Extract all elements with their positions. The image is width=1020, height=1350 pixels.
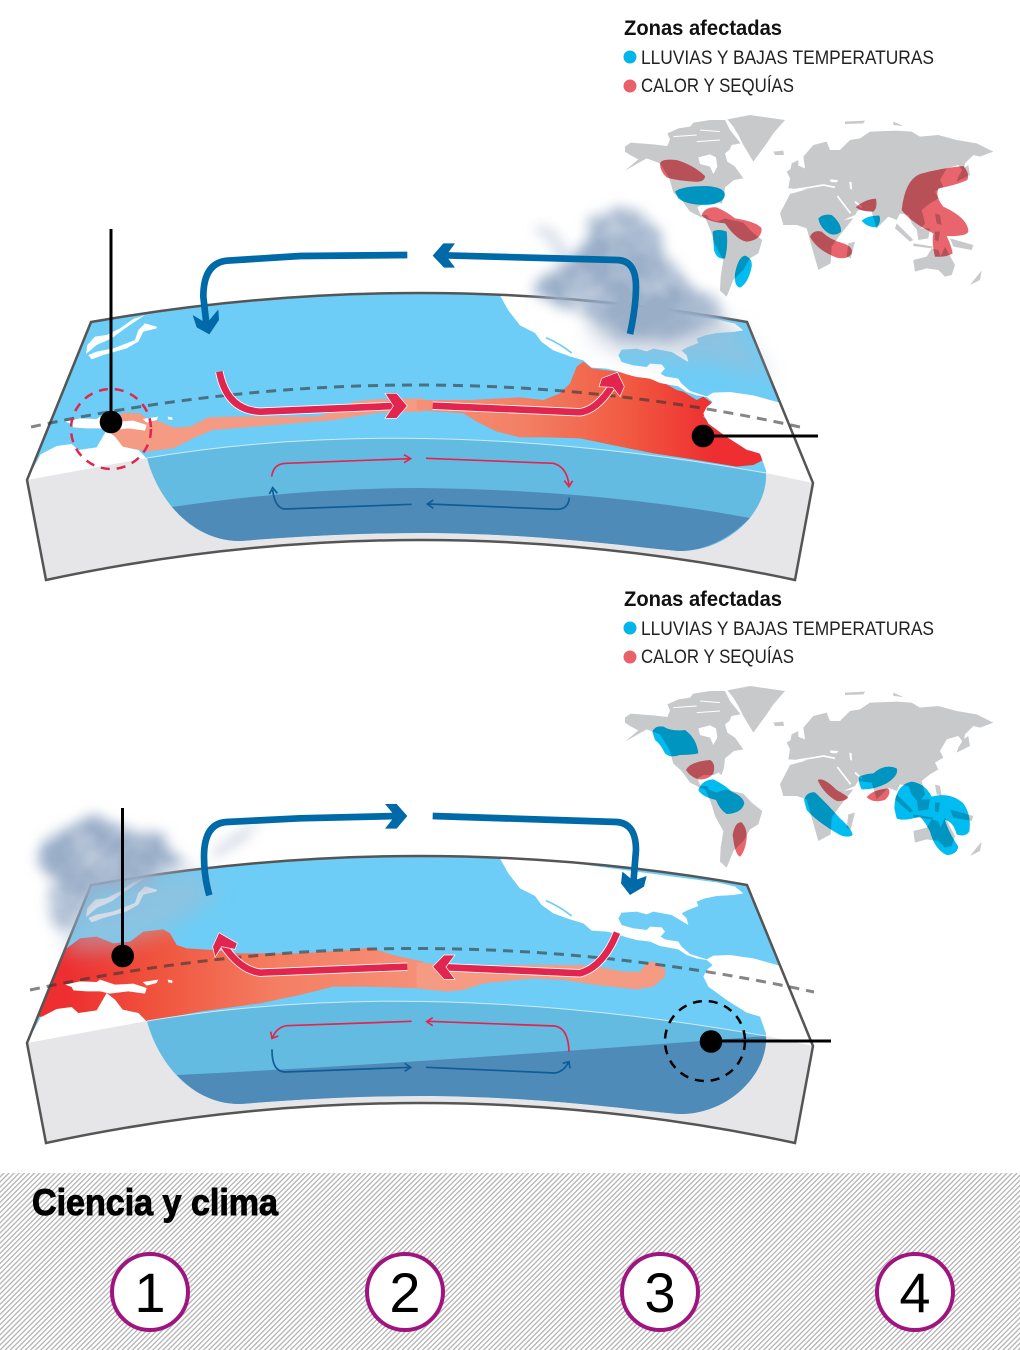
arrow: surface current, La Niña left bbox=[213, 933, 407, 973]
panel: El Niño ocean block bbox=[23, 290, 817, 580]
number badge 3 bbox=[622, 1254, 698, 1330]
cloud: La Niña bbox=[40, 818, 260, 953]
world map: La Niña bbox=[625, 686, 993, 868]
ocean cross-section bbox=[147, 438, 766, 551]
legend: El Niño: Zonas afectadas bbox=[624, 17, 782, 40]
deep cold layer bbox=[172, 488, 750, 551]
deep cold layer bbox=[177, 1036, 766, 1114]
footer band bbox=[0, 1173, 1020, 1350]
arrow: atmospheric circulation, La Niña right bbox=[433, 816, 647, 895]
number badge 1 bbox=[112, 1254, 188, 1330]
legend: La Niña: Zonas afectadas bbox=[624, 588, 782, 611]
legend: El Niño: CALOR Y SEQUÍAS bbox=[641, 74, 794, 97]
land: Americas bbox=[500, 853, 817, 1053]
number badge 3: 3 bbox=[644, 1261, 676, 1324]
equator line: La Niña bbox=[30, 948, 814, 992]
cloud: El Niño bbox=[533, 209, 773, 380]
block outline bbox=[27, 856, 813, 1143]
land: Americas bbox=[500, 290, 817, 490]
marker: west Pacific, El Niño bbox=[71, 229, 151, 469]
heading: Ciencia y clima bbox=[32, 1182, 278, 1223]
climate zones bbox=[652, 726, 970, 857]
warm water pool bbox=[107, 362, 763, 467]
arrow: surface current, El Niño right bbox=[433, 372, 624, 412]
legend: La Niña bbox=[624, 588, 934, 668]
arrows: subsurface circulation, La Niña right bbox=[426, 1018, 570, 1073]
arrow: atmospheric circulation, La Niña left bbox=[204, 804, 407, 895]
arrows: subsurface circulation, El Niño right bbox=[426, 458, 573, 509]
warm water band bbox=[37, 929, 665, 1022]
climate zones bbox=[660, 160, 968, 288]
marker: east Pacific, El Niño bbox=[692, 425, 818, 447]
arrow: atmospheric circulation, El Niño left bbox=[193, 255, 407, 334]
number badge 1: 1 bbox=[134, 1261, 166, 1324]
arrow: surface current, La Niña right bbox=[433, 933, 617, 979]
arrow: atmospheric circulation, El Niño right bbox=[433, 243, 636, 334]
block outline bbox=[27, 293, 813, 580]
number badge 4: 4 bbox=[899, 1261, 931, 1324]
number badge 4 bbox=[877, 1254, 953, 1330]
world map: El Niño bbox=[625, 115, 993, 297]
land: west Pacific bbox=[23, 878, 172, 1050]
arrow: surface current, El Niño left bbox=[219, 372, 407, 418]
marker: west Pacific, La Niña bbox=[111, 808, 134, 967]
number badge 2: 2 bbox=[389, 1261, 421, 1324]
legend: El Niño bbox=[624, 17, 934, 97]
legend: El Niño: LLUVIAS Y BAJAS TEMPERATURAS bbox=[641, 47, 934, 69]
legend: La Niña: LLUVIAS Y BAJAS TEMPERATURAS bbox=[641, 618, 934, 640]
panel: La Niña ocean block bbox=[23, 853, 817, 1143]
seabed block bbox=[27, 1001, 813, 1143]
marker: east Pacific, La Niña bbox=[665, 1001, 831, 1081]
seabed block bbox=[27, 438, 813, 580]
equator line: El Niño bbox=[31, 385, 800, 427]
arrows: subsurface circulation, El Niño left bbox=[269, 455, 412, 509]
legend: La Niña: CALOR Y SEQUÍAS bbox=[641, 645, 794, 668]
number badge 2 bbox=[367, 1254, 443, 1330]
arrows: subsurface circulation, La Niña left bbox=[271, 1021, 412, 1072]
land: west Pacific bbox=[23, 315, 172, 487]
ocean cross-section bbox=[147, 1001, 766, 1114]
